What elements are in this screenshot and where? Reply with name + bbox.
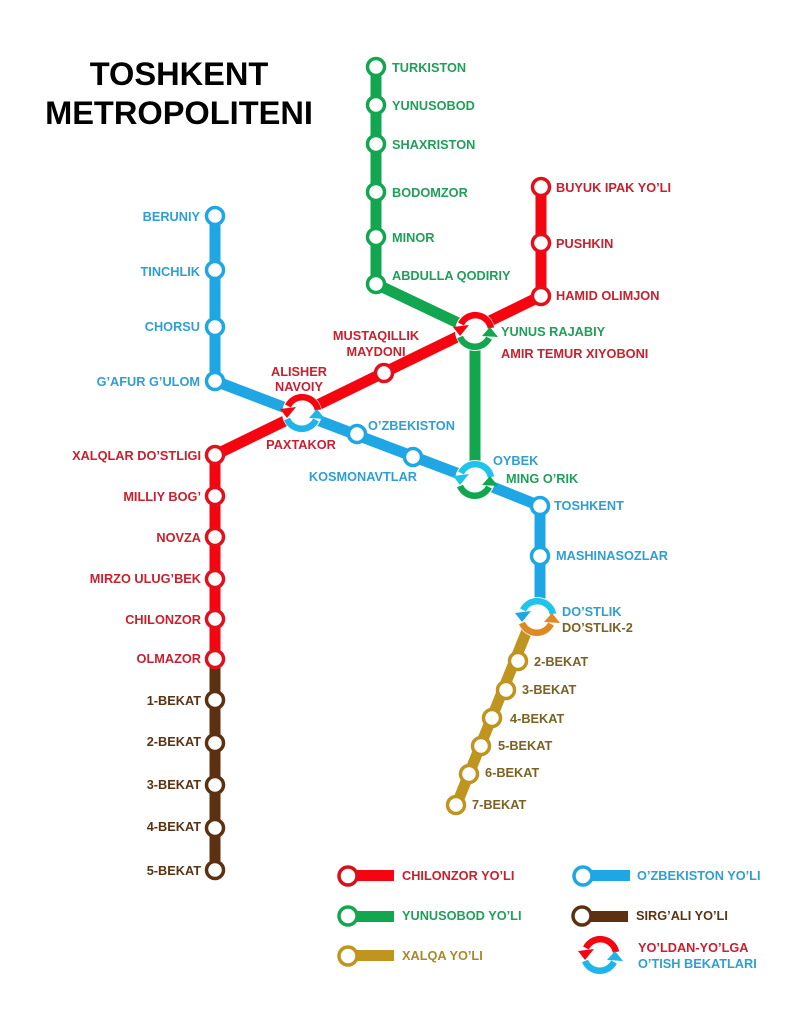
labels: green line: ABDULLA QODIRIY bbox=[392, 268, 511, 283]
legend: interchange text: O’TISH BEKATLARI bbox=[638, 956, 757, 971]
labels: green line: SHAXRISTON bbox=[392, 137, 475, 152]
title bbox=[45, 55, 313, 131]
interchange: Do'stlik / Do'stlik-2 bbox=[515, 597, 560, 637]
labels: blue line: DO’STLIK bbox=[562, 604, 622, 619]
labels: red line: OLMAZOR bbox=[137, 651, 201, 666]
stations: gold line bbox=[448, 652, 526, 814]
labels: green line: BODOMZOR bbox=[392, 185, 468, 200]
labels: gold line: 4-BEKAT bbox=[510, 711, 565, 726]
labels: blue line: TOSHKENT bbox=[554, 498, 624, 513]
labels: green line bbox=[392, 60, 606, 486]
labels: brown line: 2-BEKAT bbox=[147, 734, 201, 749]
labels: green line: MING O’RIK bbox=[506, 471, 579, 486]
labels: green line: YUNUSOBOD bbox=[392, 98, 475, 113]
labels: red line: MIRZO ULUG’BEK bbox=[90, 571, 202, 586]
labels: red line: BUYUK IPAK YO’LI bbox=[556, 180, 671, 195]
legend: interchange icon bbox=[578, 939, 623, 971]
line: Sirg'ali (brown) bbox=[210, 659, 220, 870]
labels: blue line: TINCHLIK bbox=[140, 264, 201, 279]
legend: Sirg'ali: SIRG’ALI YO’LI bbox=[636, 908, 728, 923]
labels: red line: PAXTAKOR bbox=[266, 437, 336, 452]
labels: red line: MAYDONI bbox=[346, 344, 406, 359]
labels: brown line: 5-BEKAT bbox=[147, 863, 201, 878]
labels: gold line: DO’STLIK-2 bbox=[562, 620, 633, 635]
labels: green line: YUNUS RAJABIY bbox=[501, 324, 606, 339]
labels: blue line: MASHINASOZLAR bbox=[556, 548, 668, 563]
legend: Xalqa bbox=[339, 947, 483, 965]
labels: blue line bbox=[97, 209, 668, 619]
line: Chilonzor (red) bbox=[215, 187, 541, 659]
stations: blue line bbox=[206, 208, 548, 564]
labels: gold line: 5-BEKAT bbox=[498, 738, 553, 753]
labels: red line: NAVOIY bbox=[275, 379, 323, 394]
labels: green line: MINOR bbox=[392, 230, 434, 245]
legend: interchange text: YO’LDAN-YO’LGA bbox=[638, 940, 748, 955]
legend: O'zbekiston bbox=[574, 867, 761, 885]
legend: Yunusobod bbox=[339, 907, 522, 925]
labels: red line: AMIR TEMUR XIYOBONI bbox=[501, 346, 648, 361]
line: Xalqa (gold) bbox=[456, 628, 528, 806]
labels: blue line: OYBEK bbox=[493, 453, 539, 468]
labels: blue line: G’AFUR G’ULOM bbox=[97, 374, 200, 389]
labels: red line: MUSTAQILLIK bbox=[333, 328, 420, 343]
labels: red line: PUSHKIN bbox=[556, 236, 613, 251]
labels: blue line: CHORSU bbox=[145, 319, 200, 334]
labels: blue line: BERUNIY bbox=[143, 209, 200, 224]
line: Yunusobod (green) bbox=[376, 67, 475, 480]
labels: gold line bbox=[472, 620, 633, 812]
labels: brown line: 3-BEKAT bbox=[147, 777, 201, 792]
labels: gold line: 6-BEKAT bbox=[485, 765, 540, 780]
legend: Xalqa: XALQA YO’LI bbox=[402, 948, 483, 963]
labels: brown line: 4-BEKAT bbox=[147, 819, 201, 834]
title: TOSHKENT bbox=[90, 55, 268, 92]
legend: Chilonzor: CHILONZOR YO’LI bbox=[402, 868, 514, 883]
labels: gold line: 7-BEKAT bbox=[472, 797, 527, 812]
labels: red line: MILLIY BOG’ bbox=[123, 489, 201, 504]
labels: blue line: KOSMONAVTLAR bbox=[309, 469, 417, 484]
labels: red line: NOVZA bbox=[156, 530, 201, 545]
legend: interchange text bbox=[638, 940, 757, 971]
legend: Chilonzor bbox=[339, 867, 514, 885]
labels: red line: ALISHER bbox=[271, 364, 327, 379]
labels: gold line: 3-BEKAT bbox=[522, 682, 577, 697]
labels: red line: XALQLAR DO’STLIGI bbox=[72, 448, 201, 463]
legend: Sirg'ali bbox=[573, 907, 728, 925]
labels: blue line: O’ZBEKISTON bbox=[368, 418, 455, 433]
labels: red line: CHILONZOR bbox=[125, 612, 201, 627]
legend: Yunusobod: YUNUSOBOD YO’LI bbox=[402, 908, 522, 923]
stations: green line bbox=[368, 58, 384, 292]
stations: red line bbox=[206, 178, 550, 668]
title: METROPOLITENI bbox=[45, 94, 313, 131]
labels: green line: TURKISTON bbox=[392, 60, 466, 75]
stations: brown line bbox=[206, 692, 224, 878]
labels: brown line bbox=[147, 693, 201, 878]
interchange: Oybek / Ming O'rik bbox=[453, 460, 498, 500]
labels: red line bbox=[72, 180, 671, 666]
interchange: Alisher Navoiy / Paxtakor bbox=[280, 393, 325, 433]
line: O'zbekiston (blue) bbox=[215, 216, 540, 600]
labels: brown line: 1-BEKAT bbox=[147, 693, 201, 708]
labels: gold line: 2-BEKAT bbox=[534, 654, 589, 669]
interchange: Yunus Rajabiy / Amir Temur Xiyoboni bbox=[453, 311, 498, 351]
legend: O'zbekiston: O’ZBEKISTON YO’LI bbox=[637, 868, 761, 883]
labels: red line: HAMID OLIMJON bbox=[556, 288, 659, 303]
